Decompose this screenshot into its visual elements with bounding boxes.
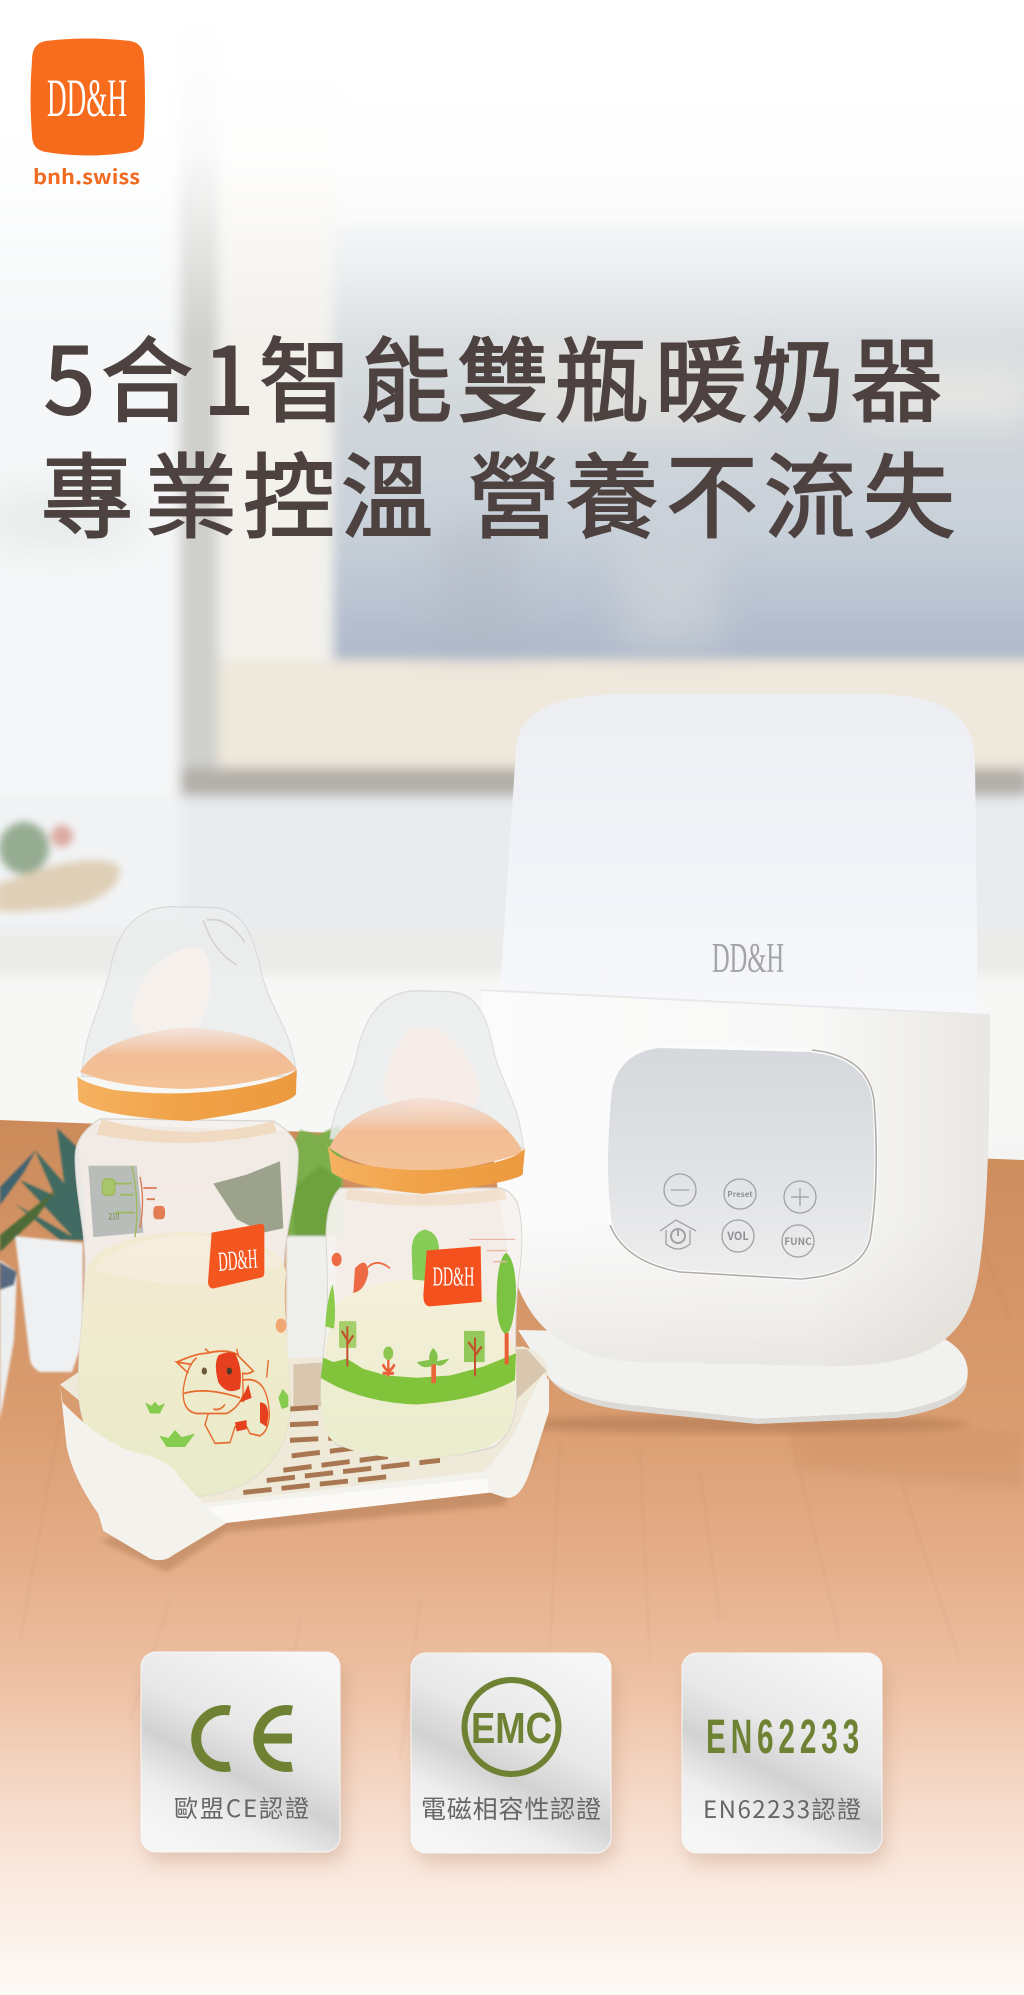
back plants and pots bbox=[0, 1125, 345, 1420]
large bottle glass body bbox=[75, 1119, 298, 1496]
control buttons bbox=[660, 1174, 816, 1257]
small flower bbox=[276, 1318, 286, 1333]
small bottle label bbox=[423, 1246, 482, 1306]
small bottle label: DD&H bbox=[433, 1262, 474, 1292]
small bottle green band bbox=[321, 1353, 516, 1405]
button labels: FUNC bbox=[784, 1233, 812, 1248]
large bottle nipple dome bbox=[82, 907, 297, 1076]
CE mark bbox=[196, 1710, 292, 1767]
small bottle milk bbox=[321, 1280, 516, 1459]
tray interior grille bbox=[60, 1347, 548, 1505]
logo url: bnh.swiss bbox=[33, 161, 140, 190]
title bbox=[41, 308, 955, 557]
small bottle graduations bbox=[470, 1239, 515, 1262]
bottle warmer device bbox=[481, 694, 990, 1424]
blurred potted plant on shelf bbox=[0, 822, 120, 912]
left succulent bbox=[0, 1128, 86, 1420]
control panel bbox=[606, 1046, 876, 1279]
lid logo: DD&H bbox=[712, 936, 784, 982]
left pot bbox=[15, 1236, 83, 1372]
logo badge bbox=[30, 38, 145, 156]
large bottle graduations: 210 bbox=[108, 1210, 119, 1223]
title line 2: 專業控溫 營養不流失 bbox=[41, 424, 955, 557]
small bottle collar bbox=[327, 1098, 525, 1194]
EMC mark: EMC bbox=[471, 1704, 552, 1753]
EMC mark bbox=[464, 1680, 558, 1774]
grass illustrations bbox=[145, 1389, 288, 1447]
button labels: Preset bbox=[727, 1189, 753, 1200]
logo bbox=[30, 38, 145, 190]
large bottle bbox=[75, 907, 298, 1496]
tray and bottles bbox=[60, 907, 549, 1572]
right succulent bbox=[286, 1125, 345, 1364]
certification badges bbox=[141, 1652, 886, 1863]
far-left leaves bbox=[0, 1150, 36, 1205]
EMC label: 電磁相容性認證 bbox=[421, 1790, 601, 1826]
wooden table bbox=[0, 1120, 1024, 1995]
EN62233 mark: EN62233 bbox=[706, 1711, 859, 1764]
large bottle milk bbox=[78, 1232, 290, 1496]
EN62233 label: EN62233認證 bbox=[703, 1790, 861, 1825]
button labels bbox=[726, 1189, 812, 1248]
base body bbox=[481, 990, 990, 1366]
small bottle neck bbox=[345, 1188, 507, 1206]
badge: CE bbox=[141, 1652, 345, 1862]
button labels: VOL bbox=[726, 1228, 749, 1244]
plant seen through glass bbox=[213, 1161, 283, 1233]
small bottle body bbox=[321, 1188, 522, 1458]
large bottle label bbox=[208, 1224, 264, 1288]
large bottle collar bbox=[77, 1027, 297, 1121]
large bottle graduations bbox=[102, 1166, 165, 1237]
badge: EN62233 bbox=[682, 1653, 886, 1863]
logo badge: DD&H bbox=[47, 68, 127, 128]
small bottle nipple dome bbox=[330, 991, 523, 1148]
large bottle neck bbox=[97, 1119, 277, 1143]
lid bbox=[499, 694, 978, 1020]
tray front rim bbox=[60, 1373, 549, 1560]
CE label: 歐盟CE認證 bbox=[174, 1789, 309, 1824]
badge: EMC bbox=[411, 1653, 615, 1863]
tray shadow bbox=[100, 1451, 540, 1572]
foot plate bbox=[518, 1330, 968, 1419]
small bottle bbox=[321, 991, 525, 1459]
far-left pot bbox=[0, 1260, 17, 1420]
large bottle label: DD&H bbox=[217, 1244, 258, 1278]
cow illustration bbox=[177, 1349, 269, 1443]
small bottle trees bbox=[325, 1230, 516, 1383]
title line 1: 5合1智能雙瓶暖奶器 bbox=[44, 308, 943, 441]
small bottle birds bbox=[332, 1253, 390, 1293]
